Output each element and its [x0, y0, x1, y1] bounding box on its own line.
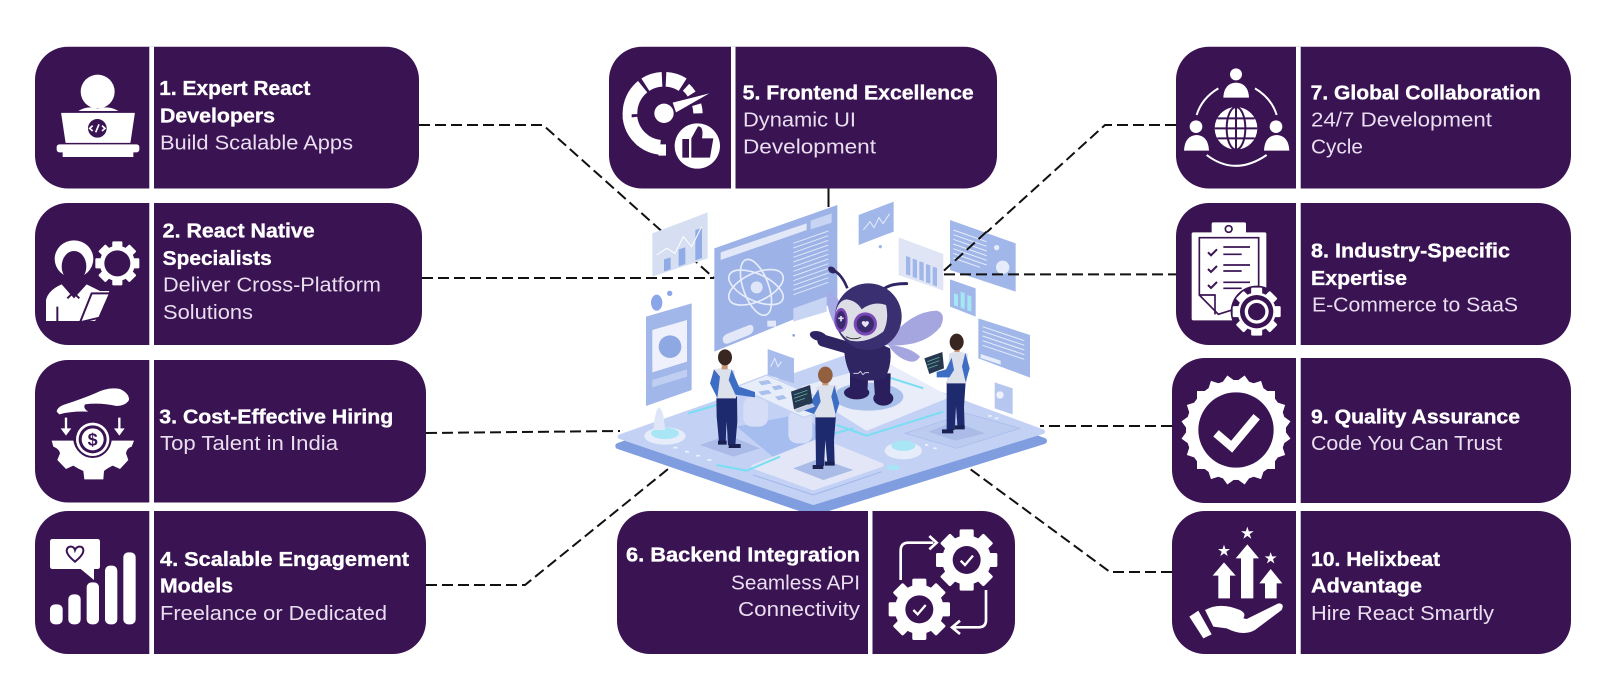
heading and text — [1311, 82, 1541, 158]
heading and text — [626, 545, 860, 621]
platform — [618, 358, 1044, 513]
heading and text: Freelance or Dedicated — [160, 603, 387, 625]
connector overlay: cards 7 and 8 across the right panels — [944, 232, 1177, 274]
central isometric illustration — [618, 202, 1177, 513]
connector: card 6 to illustration — [828, 500, 830, 511]
heading and text: E-Commerce to SaaS — [1312, 295, 1518, 317]
card 8: Industry-Specific Expertise — [1176, 203, 1571, 345]
panel: right text card — [978, 318, 1030, 378]
heading and text — [743, 82, 974, 158]
heading and text — [1311, 549, 1494, 625]
heading and text: Developers — [160, 105, 275, 127]
heading and text: 7. Global Collaboration — [1311, 82, 1541, 104]
icon: hand, coin and gear — [52, 388, 134, 479]
heading and text: 2. React Native — [163, 221, 315, 243]
panel: small badge card — [995, 382, 1013, 414]
heading and text: Advantage — [1311, 576, 1422, 598]
icon: gauge gear with thumbs up — [623, 79, 721, 170]
panel: table chart — [768, 349, 794, 383]
card 5: Frontend Excellence — [609, 47, 997, 189]
person: left developer — [710, 349, 755, 448]
heading and text: Expertise — [1311, 268, 1407, 290]
icon: people around a globe — [1184, 68, 1289, 166]
icon: specialist with gear — [46, 240, 139, 322]
heading and text: Code You Can Trust — [1311, 433, 1502, 455]
panel: mobile app — [646, 291, 692, 406]
heading and text: Models — [160, 576, 233, 598]
person: right developer — [924, 334, 970, 433]
panel: small bars — [950, 279, 976, 317]
connector: card 4 to illustration — [426, 465, 673, 585]
connectors — [419, 125, 1176, 585]
panel: top line chart — [859, 202, 894, 248]
icon: speech bubble and bars — [50, 539, 136, 624]
panel: right dashboard — [950, 220, 1016, 292]
heading and text: 5. Frontend Excellence — [743, 82, 974, 104]
heading and text: Cycle — [1311, 136, 1363, 158]
icon: hand, coin and gear: $ — [88, 430, 98, 450]
heading and text: Specialists — [163, 248, 272, 270]
heading and text: 9. Quality Assurance — [1311, 406, 1520, 428]
connector: card 7 to illustration — [987, 125, 1176, 232]
panel: faded bars right — [899, 237, 943, 291]
card 3: Cost-Effective Hiring — [35, 360, 426, 502]
connector: card 2 to illustration — [422, 277, 714, 279]
card 2: React Native Specialists — [35, 203, 422, 345]
card 10: Helixbeat Advantage — [1172, 511, 1571, 654]
heading and text — [1311, 241, 1518, 317]
heading and text: 6. Backend Integration — [626, 545, 860, 567]
card 7: Global Collaboration — [1176, 47, 1571, 189]
emitters — [644, 407, 922, 470]
heading and text: Hire React Smartly — [1311, 603, 1494, 625]
heading and text: Build Scalable Apps — [160, 132, 353, 154]
person: centre developer — [791, 367, 839, 469]
connector: card 5 to illustration — [828, 188, 830, 207]
card 6: Backend Integration — [617, 511, 1015, 654]
panel: main atom screen — [714, 205, 837, 352]
icon: hand with rising arrows and stars — [1189, 527, 1283, 638]
heading and text: 4. Scalable Engagement — [160, 549, 409, 571]
heading and text: Development — [743, 136, 876, 158]
heading and text: 1. Expert React — [159, 78, 311, 100]
connector: card 1 to illustration — [419, 125, 714, 278]
connector: card 3 to illustration — [426, 431, 620, 433]
card 9: Quality Assurance — [1172, 358, 1571, 503]
heading and text: Deliver Cross-Platform — [163, 275, 381, 297]
heading and text: 3. Cost-Effective Hiring — [159, 406, 393, 428]
heading and text — [163, 221, 381, 324]
heading and text — [159, 406, 393, 455]
heading and text: Seamless API — [731, 572, 860, 594]
icon: clipboard checklist with gear — [1192, 222, 1283, 338]
heading and text: Top Talent in India — [160, 433, 339, 455]
icon: gears with cycle arrows — [889, 529, 997, 640]
connector: card 10 to illustration — [962, 463, 1172, 572]
heading and text: Dynamic UI — [743, 110, 856, 132]
heading and text — [160, 549, 409, 625]
heading and text: Connectivity — [738, 599, 860, 621]
heading and text: 24/7 Development — [1311, 110, 1492, 132]
heading and text — [1311, 406, 1520, 455]
icon: quality badge with check — [1182, 376, 1290, 484]
bee mascot — [809, 265, 943, 411]
heading and text: 8. Industry-Specific — [1311, 241, 1510, 263]
card 4: Scalable Engagement Models — [35, 511, 426, 654]
table — [737, 375, 838, 443]
heading and text: Solutions — [163, 302, 253, 324]
heading and text — [159, 78, 353, 154]
heading and text: 10. Helixbeat — [1311, 549, 1440, 571]
connector: card 9 to illustration — [1040, 425, 1172, 427]
panel: faded chart left — [652, 212, 708, 277]
icon: developer at laptop — [57, 75, 139, 157]
card 1: Expert React Developers — [35, 47, 419, 189]
